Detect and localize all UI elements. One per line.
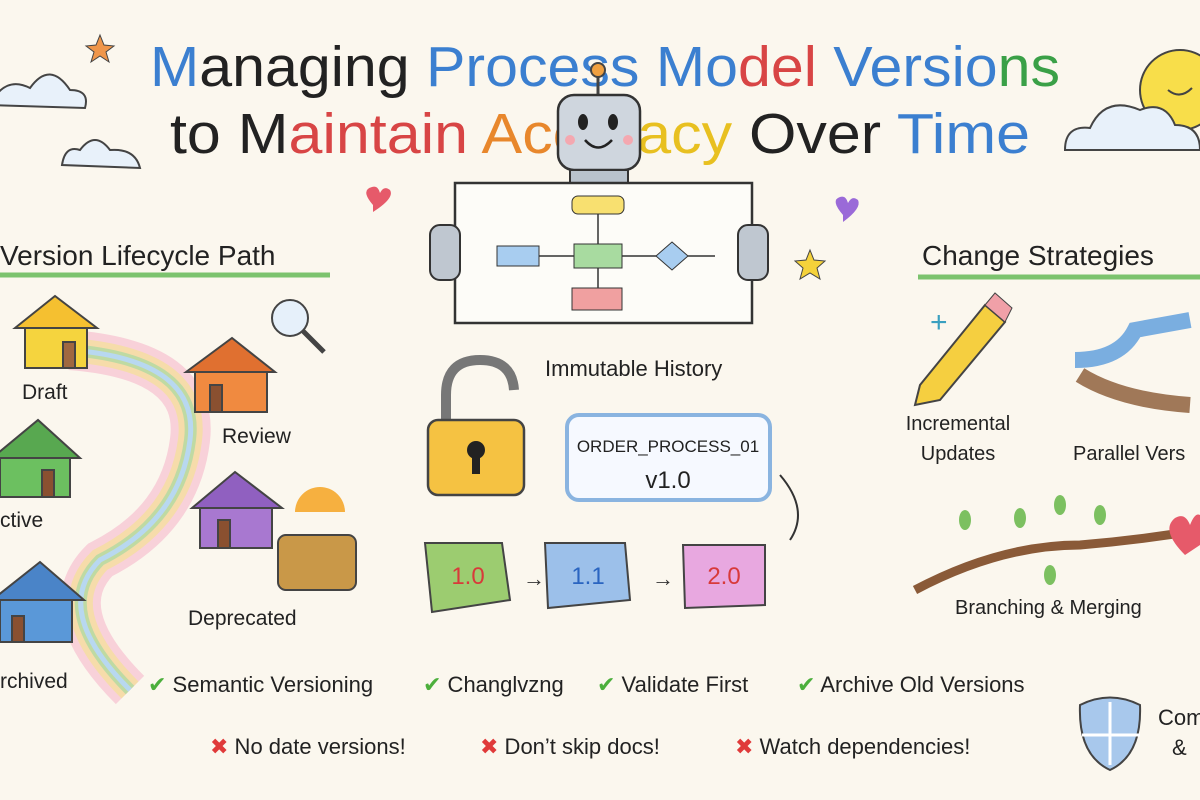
lifecycle path: Review — [222, 425, 292, 448]
strategies: Parallel Vers — [1073, 443, 1185, 465]
warnings: ✖ Don’t skip docs! — [480, 734, 660, 759]
lifecycle path: Draft — [22, 381, 68, 404]
strategies: Branching & Merging — [955, 597, 1142, 619]
houses — [0, 296, 356, 642]
shield: compliance: & — [1172, 735, 1187, 760]
best practices checklist: ✔ Changlvzng — [423, 672, 564, 697]
diagram board — [430, 183, 768, 323]
best practices checklist — [148, 672, 1025, 697]
lock & immutable history: v1.0 — [645, 467, 691, 494]
title: Managing Process Model Versions — [150, 35, 1060, 99]
version blocks: 1.0 — [451, 563, 485, 590]
lifecycle path — [0, 296, 356, 693]
strategies — [906, 293, 1200, 619]
strategies: Updates — [921, 443, 995, 465]
version blocks: → — [652, 566, 674, 591]
lock & immutable history: ORDER_PROCESS_01 — [577, 437, 759, 456]
version blocks: 1.1 — [571, 563, 605, 590]
title: to Maintain Accuracy Over Time — [170, 102, 1030, 166]
version blocks — [425, 543, 765, 612]
heading: Version Lifecycle Path: Version Lifecycle Path — [0, 240, 276, 271]
lifecycle path: rchived — [0, 670, 68, 693]
warnings: ✖ Watch dependencies! — [735, 734, 970, 759]
shield: compliance — [1080, 698, 1200, 770]
strategies: Incremental — [906, 413, 1010, 435]
best practices checklist: ✔ Archive Old Versions — [797, 672, 1025, 697]
robot — [558, 63, 640, 185]
best practices checklist: ✔ Semantic Versioning — [148, 672, 373, 697]
decorations: clouds, stars, sun — [0, 74, 140, 168]
version blocks: 2.0 — [707, 563, 741, 590]
lifecycle path: Deprecated — [188, 607, 297, 630]
heading: Change Strategies: Change Strategies — [922, 240, 1154, 271]
best practices checklist: ✔ Validate First — [597, 672, 748, 697]
lifecycle path: ctive — [0, 509, 43, 532]
warnings: ✖ No date versions! — [210, 734, 406, 759]
lock & immutable history — [428, 356, 798, 540]
strategies: + — [930, 306, 948, 339]
version blocks: → — [523, 566, 545, 591]
lock & immutable history: Immutable History — [545, 356, 722, 381]
warnings — [210, 734, 970, 759]
title — [150, 35, 1060, 166]
